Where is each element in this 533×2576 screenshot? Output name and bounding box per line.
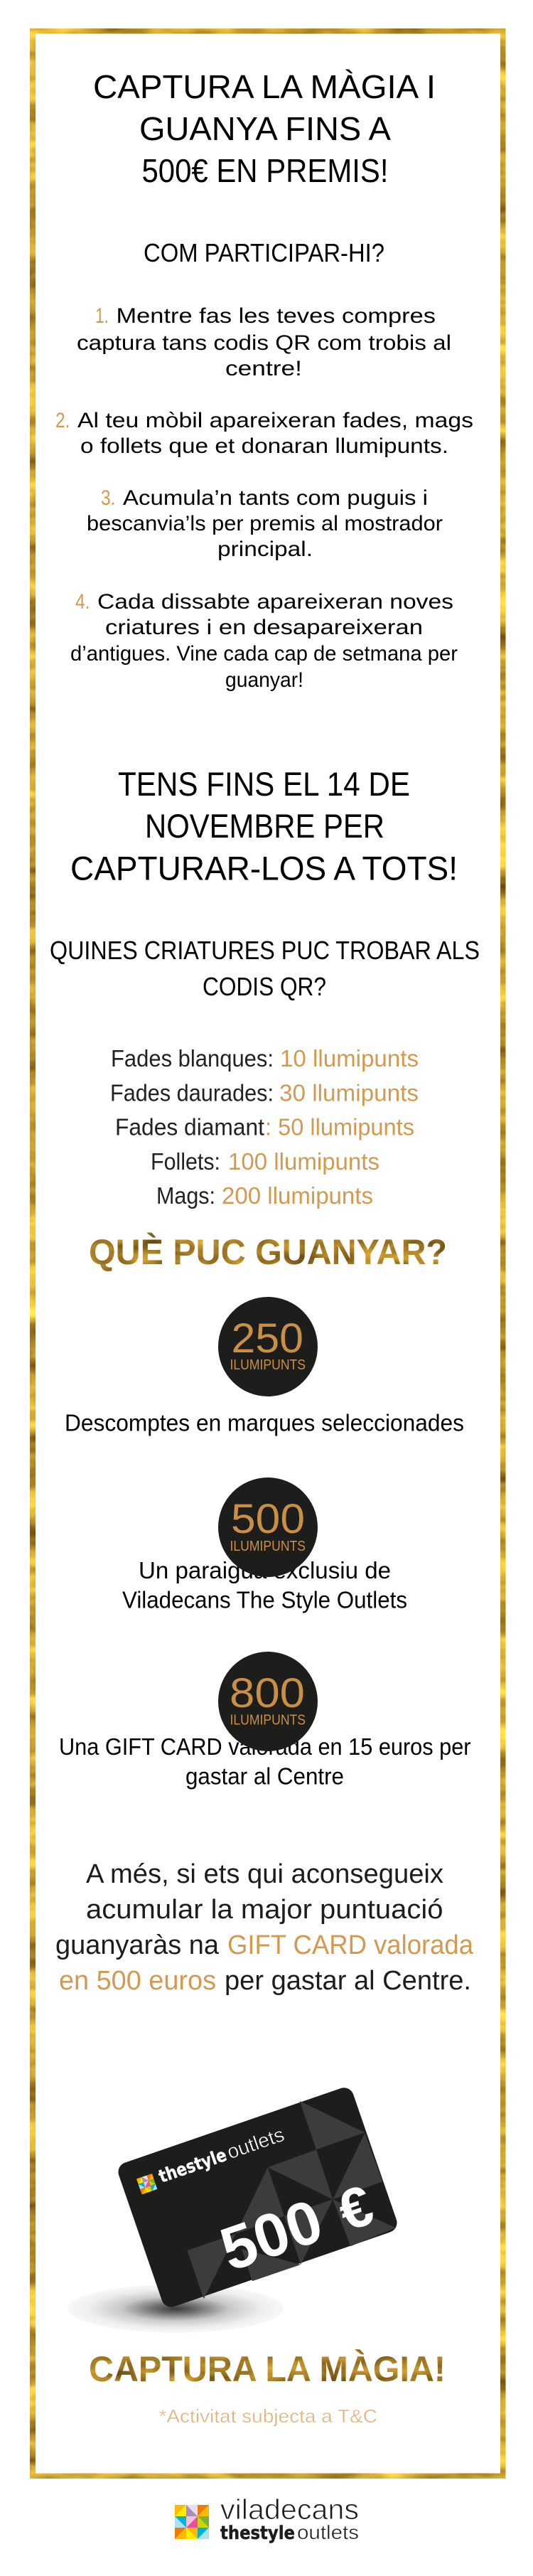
heading: creatures: CODIS QR? [203, 972, 326, 1001]
creature points list: Fades diamant [115, 1113, 264, 1140]
step 1: centre! [225, 357, 302, 380]
step 3: principal. [217, 538, 313, 561]
grand prize text: en 500 euros [59, 1966, 216, 1996]
step 3: Acumula’n tants com puguis i [123, 486, 428, 510]
card brand name: outlets [224, 2123, 287, 2163]
badge 500 [218, 1477, 318, 1577]
creature points list: 200 llumipunts [222, 1182, 373, 1209]
prize text: Un paraigua exclusiu de [139, 1557, 391, 1583]
step 1: 1. [95, 304, 109, 328]
prize 800 [59, 1652, 470, 1789]
deadline heading [70, 765, 458, 887]
prize text: Descomptes en marques seleccionades [65, 1409, 464, 1436]
step 2: 2. [55, 409, 70, 432]
logo tile [175, 2505, 209, 2539]
step 4: criatures i en desapareixeran [105, 616, 423, 639]
badge 250 [218, 1297, 318, 1396]
logo wordmark [220, 2494, 359, 2544]
logo wordmark: viladecans [220, 2494, 359, 2526]
badge 800: 800 [230, 1670, 305, 1716]
deadline heading: NOVEMBRE PER [145, 807, 384, 845]
main title: CAPTURA LA MÀGIA I [93, 68, 436, 105]
prize text [122, 1557, 407, 1613]
step 1: Mentre fas les teves compres [117, 304, 436, 328]
creature points list: Follets: [151, 1148, 220, 1175]
step 2: Al teu mòbil apareixeran fades, mags [77, 409, 473, 432]
badge 250: ILUMIPUNTS [230, 1357, 306, 1373]
creature points list: 30 llumipunts [279, 1079, 419, 1106]
steps list [55, 304, 473, 692]
logo wordmark: thestyle [220, 2523, 295, 2544]
prize text: Viladecans The Style Outlets [122, 1587, 407, 1613]
main title: GUANYA FINS A [139, 110, 391, 147]
creature points list [110, 1045, 419, 1209]
creature points list: 10 llumipunts [280, 1045, 419, 1071]
step 3: bescanvia’ls per premis al mostrador [87, 512, 443, 535]
card logo tile [136, 2174, 157, 2194]
heading: creatures [50, 936, 480, 1001]
creature points list: 100 llumipunts [228, 1148, 379, 1175]
gift card with shadow [68, 2085, 399, 2333]
main title [93, 68, 436, 189]
card body [116, 2085, 399, 2309]
step 4: d’antigues. Vine cada cap de setmana per [70, 642, 458, 666]
step 4 [70, 590, 458, 692]
prize text [59, 1733, 470, 1789]
step 1 [77, 304, 451, 380]
card brand name [156, 2123, 287, 2187]
step 1: captura tans codis QR com trobis al [77, 331, 451, 355]
heading: what can I win: QUÈ PUC GUANYAR? [89, 1232, 447, 1272]
creature points list: : 50 llumipunts [265, 1113, 414, 1140]
creature points list: Fades blanques: [111, 1045, 274, 1071]
closing slogan: CAPTURA LA MÀGIA! [89, 2349, 446, 2389]
step 2 [55, 409, 473, 458]
card amount [212, 2173, 381, 2284]
badge 250: 250 [232, 1315, 303, 1362]
grand prize text: acumular la major puntuació [86, 1895, 443, 1925]
creature points list: Fades daurades: [110, 1079, 274, 1106]
step 2: o follets que et donaran llumipunts. [80, 434, 448, 458]
badge 800: ILUMIPUNTS [230, 1712, 306, 1728]
creature points list: Mags: [156, 1182, 215, 1209]
card amount: € [330, 2173, 381, 2243]
prize 250 [65, 1297, 464, 1436]
grand prize text: A més, si ets qui aconsegueix [86, 1859, 443, 1889]
deadline heading: CAPTURAR-LOS A TOTS! [70, 849, 458, 887]
grand prize text [55, 1859, 474, 1996]
prize text: gastar al Centre [185, 1763, 344, 1789]
badge 800 [218, 1652, 318, 1751]
grand prize text: per gastar al Centre. [225, 1966, 471, 1996]
card triangle pattern [187, 2101, 396, 2299]
card amount: 500 [212, 2186, 330, 2284]
prize 500 [122, 1477, 407, 1613]
deadline heading: TENS FINS EL 14 DE [118, 765, 410, 803]
heading: com participar: COM PARTICIPAR-HI? [144, 238, 384, 267]
prize text: Una GIFT CARD valorada en 15 euros per [59, 1733, 470, 1760]
step 3: 3. [101, 486, 115, 510]
badge 500: ILUMIPUNTS [230, 1539, 306, 1554]
step 3 [87, 486, 443, 561]
viladecans logo [175, 2494, 359, 2544]
main title: 500€ EN PREMIS! [142, 152, 388, 189]
card brand name: thestyle [156, 2144, 230, 2187]
step 4: 4. [75, 590, 90, 614]
badge 500: 500 [231, 1496, 305, 1542]
terms note: *Activitat subjecta a T&C [159, 2405, 377, 2427]
grand prize text: GIFT CARD valorada [227, 1930, 474, 1960]
grand prize text: guanyaràs na [55, 1930, 220, 1960]
card shadow [68, 2284, 284, 2333]
logo wordmark: outlets [297, 2521, 359, 2543]
step 4: Cada dissabte apareixeran noves [97, 590, 453, 614]
step 4: guanyar! [225, 668, 303, 692]
heading: creatures: QUINES CRIATURES PUC TROBAR ALS [50, 936, 480, 965]
